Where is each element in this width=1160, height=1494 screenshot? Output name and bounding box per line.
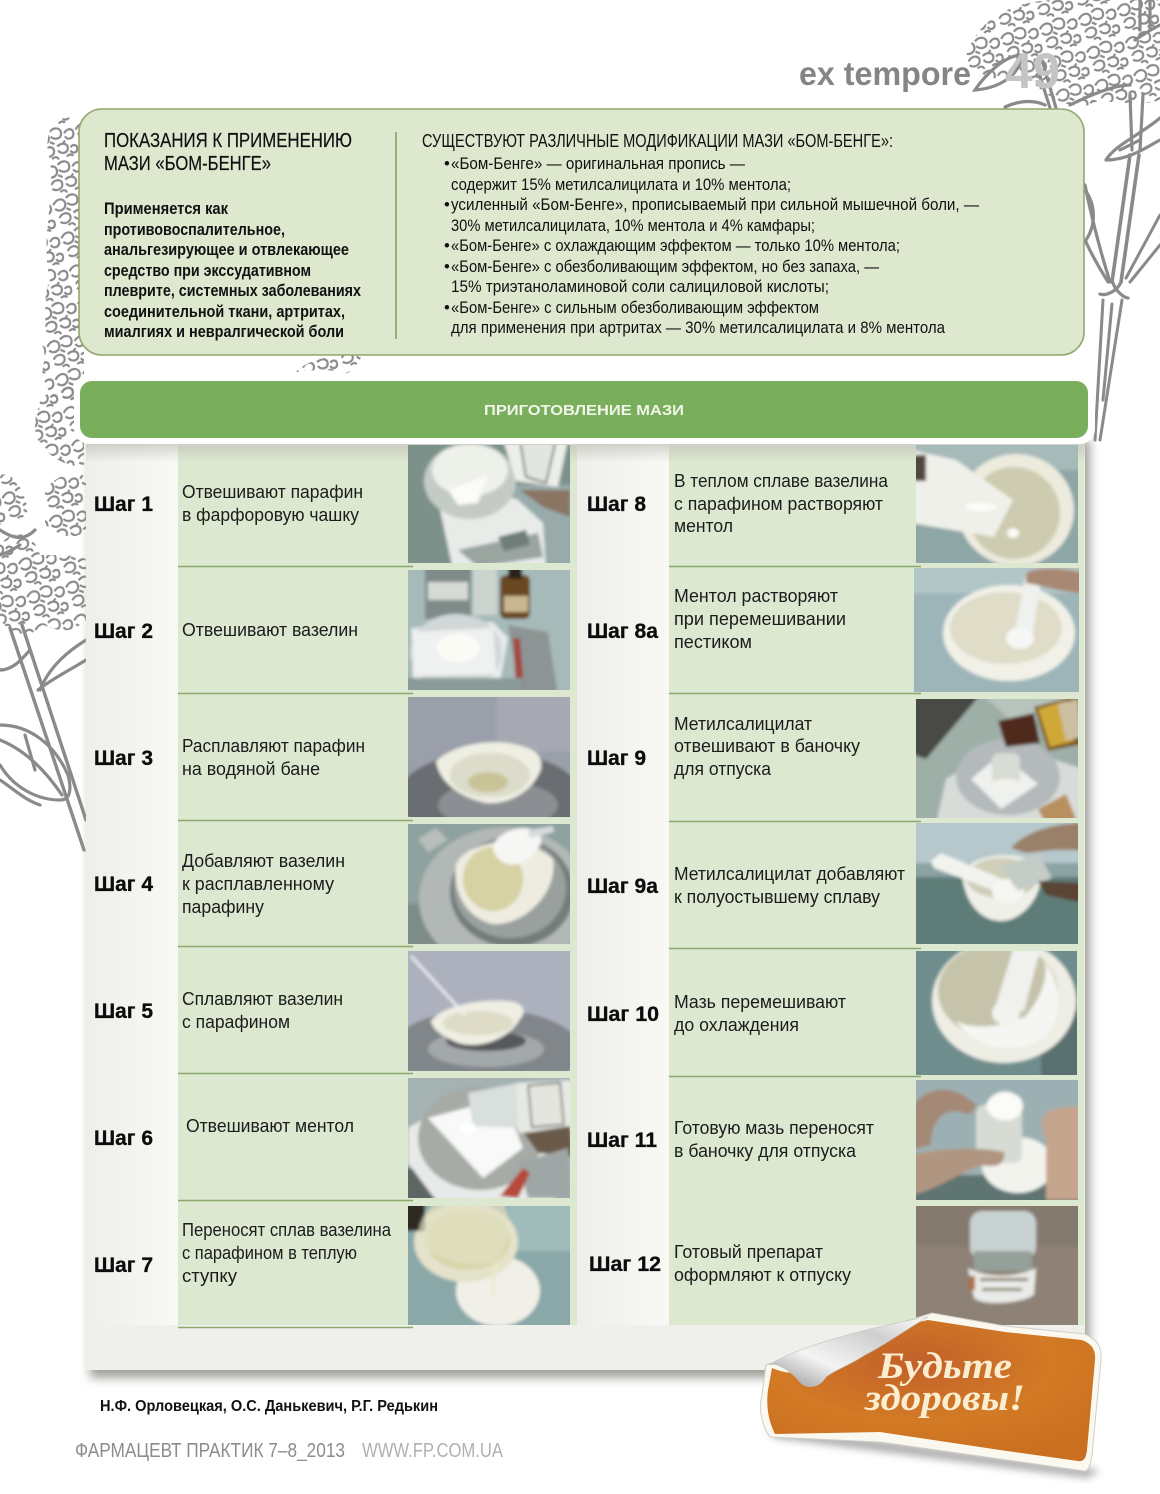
step 8a: пестиком [674, 631, 752, 652]
step 6: Отвешивают ментол [186, 1115, 354, 1136]
step 5: Сплавляют вазелин [182, 988, 343, 1009]
text block: indications: миалгиях и невралгической боли [104, 323, 344, 341]
photo: step 12 [916, 1206, 1078, 1325]
header: page number: 49 [1005, 43, 1060, 99]
step 5: с парафином [182, 1011, 290, 1032]
heading: indications [104, 130, 352, 175]
footer: website: WWW.FP.COM.UA [362, 1440, 504, 1462]
step 8: с парафином растворяют [674, 493, 883, 514]
step 3 [94, 692, 582, 842]
text block: indications: Применяется как [104, 200, 229, 218]
step 8 [587, 440, 1083, 570]
step 8: ментол [674, 515, 733, 536]
step 9: Шаг 9 [587, 747, 646, 770]
plant illustration: left [0, 118, 362, 850]
step 9: Метилсалицилат [674, 713, 812, 734]
text block: modifications list: • [444, 196, 450, 214]
step 1: в фарфоровую чашку [182, 504, 360, 525]
step 9a: Метилсалицилат добавляют [674, 863, 905, 884]
step 9 [587, 694, 1083, 824]
step 5 [94, 946, 581, 1093]
text block: modifications list: «Бом-Бенге» с обезболивающим эффектом, но без запаха, — [451, 258, 879, 276]
banner: preparation heading: ПРИГОТОВЛЕНИЕ МАЗИ [484, 402, 684, 419]
heading: modifications: СУЩЕСТВУЮТ РАЗЛИЧНЫЕ МОДИФИКАЦИИ МАЗИ «БОМ-БЕНГЕ»: [422, 131, 893, 151]
step 4: к расплавленному [182, 873, 335, 894]
step 2: Шаг 2 [94, 620, 153, 643]
step 5: Шаг 5 [94, 1000, 153, 1023]
step 3: Расплавляют парафин [182, 735, 365, 756]
text block: indications: средство при экссудативном [104, 262, 311, 280]
step 11: Шаг 11 [587, 1129, 657, 1152]
step 12 [589, 1201, 1083, 1331]
photo: step 3 [408, 697, 570, 817]
step 3: Шаг 3 [94, 747, 153, 770]
text block: modifications list: • [444, 155, 450, 173]
heading: indications: ПОКАЗАНИЯ К ПРИМЕНЕНИЮ [104, 130, 352, 152]
step 4 [94, 819, 589, 971]
step 12: оформляют к отпуску [674, 1264, 852, 1285]
step 8a: Ментол растворяют [674, 585, 838, 606]
step 10: до охлаждения [674, 1014, 799, 1035]
step 6: Шаг 6 [94, 1127, 153, 1150]
step 9a: Шаг 9а [587, 875, 658, 898]
panel: preparation steps background [86, 440, 1090, 1378]
header: section name: ex tempore [799, 55, 971, 92]
text block: modifications list: • [444, 237, 450, 255]
step 7: Шаг 7 [94, 1254, 153, 1277]
text block: modifications list: • [444, 258, 450, 276]
text block: modifications list: 15% триэтаноламиновой соли салициловой кислоты; [451, 278, 829, 296]
author credits: Н.Ф. Орловецкая, О.С. Данькевич, Р.Г. Редькин [100, 1398, 438, 1415]
step 4: парафину [182, 896, 265, 917]
photo: step 2 [408, 570, 570, 690]
step 8a: Шаг 8а [587, 620, 658, 643]
photo: step 9 [916, 699, 1078, 818]
photo: step 1 [408, 445, 570, 563]
photo: step 11 [916, 1080, 1078, 1200]
photo: step 7 [408, 1206, 570, 1325]
text block: modifications list: для применения при артритах — 30% метилсалицилата и 8% ментола [451, 319, 946, 337]
step 1 [94, 440, 575, 570]
text block: indications [104, 200, 362, 341]
step 11: в баночку для отпуска [674, 1140, 857, 1161]
step 8: Шаг 8 [587, 493, 646, 516]
text block: indications: плеврите, системных заболеваниях [104, 282, 362, 300]
photo: step 9a [916, 823, 1078, 944]
sticker text: Будьте [877, 1346, 1012, 1387]
step 4: Добавляют вазелин [182, 850, 345, 871]
step 3: на водяной бане [182, 758, 320, 779]
sticker text [864, 1346, 1025, 1419]
photo: step 5 [408, 951, 570, 1071]
step 9a: к полуостывшему сплаву [674, 886, 881, 907]
photo: step 6 [408, 1078, 570, 1198]
step 8a [587, 563, 1084, 697]
step 2 [94, 565, 575, 695]
step 6 [94, 1073, 576, 1203]
text block: indications: соединительной ткани, артритах, [104, 303, 345, 321]
sticker text: здоровы! [864, 1378, 1025, 1419]
photo: step 4 [408, 824, 570, 944]
sticker: be healthy [760, 1313, 1101, 1478]
text block: modifications list: • [444, 299, 450, 317]
step 7: с парафином в теплую [182, 1242, 357, 1263]
step 9: для отпуска [674, 758, 772, 779]
text block: modifications list: «Бом-Бенге» с сильным обезболивающим эффектом [451, 299, 819, 317]
text block: modifications list: усиленный «Бом-Бенге», прописываемый при сильной мышечной боли, — [451, 196, 979, 214]
photo: step 10 [916, 951, 1077, 1075]
step 7: ступку [182, 1265, 238, 1286]
step 7: Переносят сплав вазелина [182, 1219, 392, 1240]
text block: modifications list: содержит 15% метилсалицилата и 10% ментола; [451, 176, 791, 194]
step 9a [587, 818, 1083, 949]
footer: magazine issue: ФАРМАЦЕВТ ПРАКТИК 7–8_2013 [75, 1440, 345, 1462]
step 9: отвешивают в баночку [674, 735, 861, 756]
panel: indications and modifications [79, 109, 1084, 355]
heading: indications: МАЗИ «БОМ-БЕНГЕ» [104, 153, 271, 175]
text block: modifications list: «Бом-Бенге» с охлаждающим эффектом — только 10% ментола; [451, 237, 900, 255]
text block: indications: противовоспалительное, [104, 221, 285, 239]
banner: preparation heading [74, 375, 1095, 444]
photo: step 8a [914, 568, 1079, 692]
step 10: Мазь перемешивают [674, 991, 846, 1012]
text block: modifications list [444, 155, 979, 337]
step 2: Отвешивают вазелин [182, 619, 358, 640]
photo: step 8 [916, 445, 1078, 563]
step 7 [94, 1201, 575, 1331]
step 12: Готовый препарат [674, 1241, 823, 1262]
step 10: Шаг 10 [587, 1003, 659, 1026]
text block: modifications list: «Бом-Бенге» — оригинальная пропись — [451, 155, 745, 173]
step 1: Отвешивают парафин [182, 481, 363, 502]
step 11: Готовую мазь переносят [674, 1117, 874, 1138]
text block: indications: анальгезирующее и отвлекающее [104, 241, 349, 259]
step 8: В теплом сплаве вазелина [674, 470, 889, 491]
step 4: Шаг 4 [94, 873, 153, 896]
step 12: Шаг 12 [589, 1253, 661, 1276]
step 11 [587, 1075, 1083, 1205]
text block: modifications list: 30% метилсалицилата, 10% ментола и 4% камфары; [451, 217, 815, 235]
step 8a: при перемешивании [674, 608, 846, 629]
plant illustration: top right [965, 0, 1160, 440]
step 10 [587, 939, 1082, 1081]
step 1: Шаг 1 [94, 493, 153, 516]
